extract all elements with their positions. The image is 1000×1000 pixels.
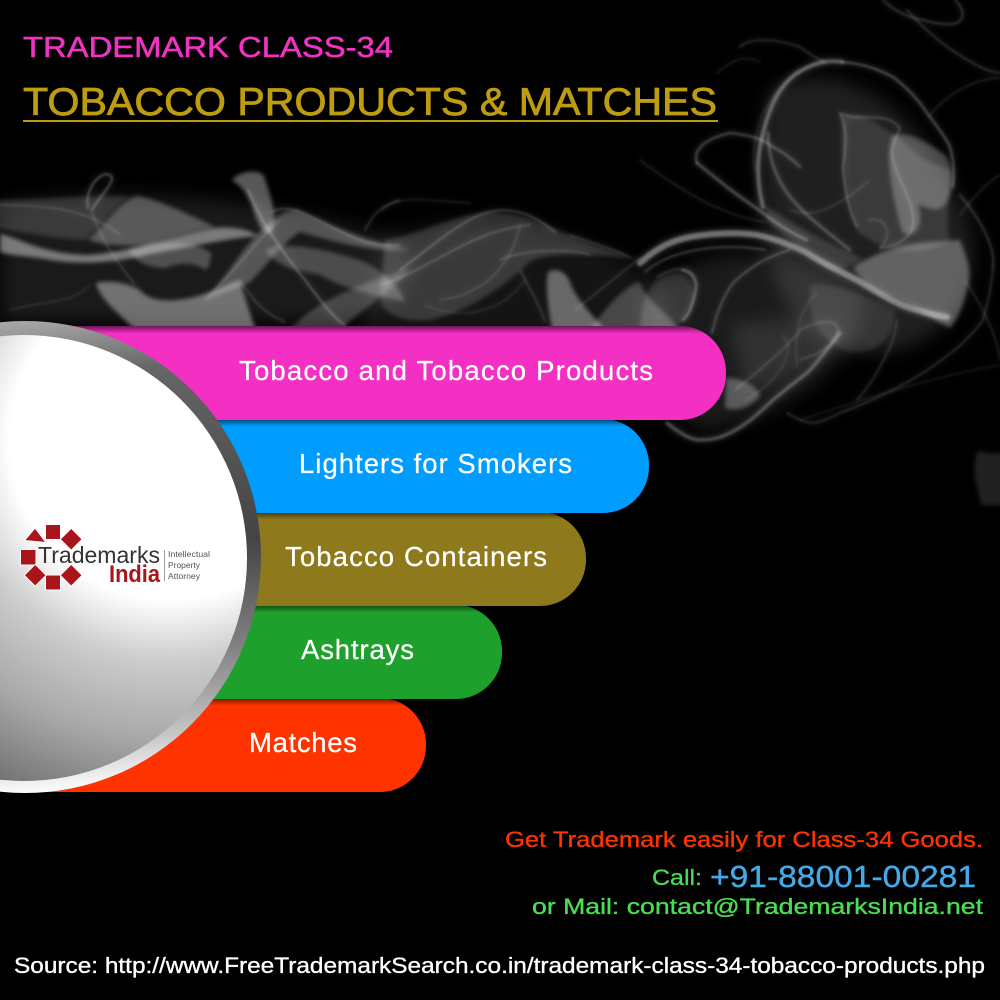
smoke: left wave: [0, 172, 410, 330]
email: or Mail: contact@TrademarksIndia.net: [532, 894, 983, 919]
pill: Matches: [0, 698, 426, 792]
pill: Ashtrays: Ashtrays: [301, 634, 414, 665]
logo divider: [163, 550, 166, 581]
heading: Tobacco Products & Matches: TOBACCO PRODUCTS & MATCHES: [23, 81, 717, 124]
logo tagline: Property: [168, 560, 201, 570]
logo wordmark: India: India: [109, 561, 161, 588]
smoke: swirl loop right: [640, 0, 1000, 505]
logo tagline: Attorney: [168, 571, 201, 581]
smoke: broad haze: [0, 78, 973, 430]
pill: Lighters for Smokers: [0, 419, 649, 513]
phone number: +91-88001-00281: [710, 859, 976, 894]
pill: Tobacco and Tobacco Products: Tobacco and Tobacco Products: [239, 355, 653, 386]
logo: Trademarks India: [20, 524, 210, 590]
logo tagline: Intellectual: [168, 549, 210, 559]
smoke background: [0, 0, 1000, 505]
pill: Matches: Matches: [249, 727, 357, 758]
pill: Ashtrays: [0, 605, 502, 699]
pill: Tobacco and Tobacco Products: [0, 326, 726, 420]
call to action: Get Trademark easily for Class-34 Goods.: [505, 827, 983, 852]
pill: Lighters for Smokers: Lighters for Smokers: [299, 448, 572, 479]
logo wordmark: Trademarks: [38, 542, 160, 568]
contact block: [505, 827, 983, 919]
source line: Source: http://www.FreeTrademarkSearch.co.in/trademark-class-34-tobacco-products.php: [14, 953, 985, 978]
title underline: [23, 120, 718, 122]
pill: Tobacco Containers: [0, 512, 586, 606]
logo mark: red squares: [20, 524, 82, 590]
logo tagline: [168, 549, 210, 581]
badge disc: [0, 335, 247, 781]
smoke: centre wave: [380, 200, 680, 330]
pill: Tobacco Containers: Tobacco Containers: [285, 541, 547, 572]
badge ring: [0, 321, 261, 793]
title block: [23, 32, 718, 124]
category pills: [0, 326, 726, 792]
circular logo badge: [0, 321, 261, 793]
heading: Trademark Class-34: TRADEMARK CLASS-34: [23, 32, 393, 64]
call label: Call:: [652, 865, 702, 890]
